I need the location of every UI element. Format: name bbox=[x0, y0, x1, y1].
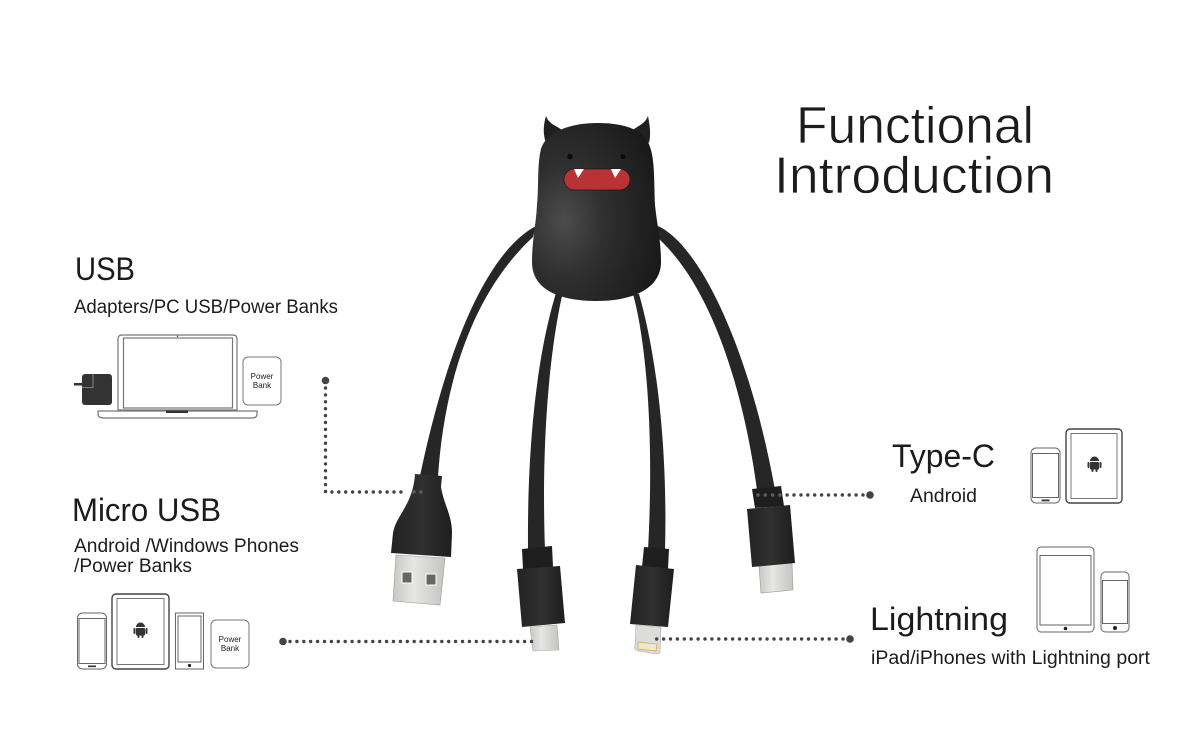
icon: power bank: Power bbox=[251, 372, 274, 381]
icon: android bbox=[1088, 456, 1102, 472]
USB plug bbox=[391, 474, 452, 605]
icon: laptop bbox=[98, 335, 257, 418]
left outer cable bbox=[420, 226, 536, 477]
title bbox=[774, 97, 1054, 205]
icon: USB devices bbox=[74, 335, 281, 418]
icon: tablet bbox=[1066, 429, 1122, 503]
icon: phone bbox=[78, 613, 106, 669]
icon: Micro USB devices bbox=[78, 594, 249, 669]
icon: Lightning devices bbox=[1037, 547, 1129, 632]
Lightning plug bbox=[630, 547, 674, 654]
dotted leader: USB bbox=[322, 377, 422, 492]
right outer cable bbox=[658, 226, 775, 490]
text block: Micro USB bbox=[72, 492, 299, 577]
icon: power bank: Power bbox=[219, 635, 242, 644]
dotted leader: Micro USB bbox=[279, 638, 538, 645]
icon: power bank: Bank bbox=[221, 644, 240, 653]
text block: Type-C bbox=[892, 438, 995, 507]
text block: Micro USB: Android /Windows Phones bbox=[74, 536, 299, 557]
icon: phone bbox=[1031, 448, 1060, 503]
mouth bbox=[564, 169, 630, 190]
text block: Lightning: Lightning bbox=[870, 601, 1008, 637]
text block: USB: USB bbox=[75, 251, 135, 287]
inner left cable bbox=[528, 293, 562, 550]
icon: power bank bbox=[243, 357, 281, 405]
icon: windows phone bbox=[176, 613, 204, 669]
text block: Micro USB: Micro USB bbox=[72, 492, 221, 528]
text block: USB: Adapters/PC USB/Power Banks bbox=[74, 297, 338, 318]
icon: iPad bbox=[1037, 547, 1094, 632]
dotted leader: Lightning bbox=[653, 635, 854, 643]
horns bbox=[544, 116, 562, 143]
title: Introduction bbox=[774, 147, 1054, 205]
icon: power bank bbox=[211, 620, 249, 668]
character cables bbox=[420, 226, 775, 550]
text block: Type-C: Type-C bbox=[892, 438, 995, 474]
text block: Type-C: Android bbox=[910, 486, 977, 507]
eyes bbox=[567, 154, 573, 159]
fangs bbox=[574, 169, 584, 178]
text block: Lightning: iPad/iPhones with Lightning port bbox=[871, 648, 1151, 669]
text block: Lightning bbox=[870, 601, 1151, 669]
icon: power bank: Bank bbox=[253, 381, 272, 390]
dotted leader: Type-C bbox=[758, 491, 874, 499]
icon: tablet bbox=[112, 594, 169, 669]
body shape bbox=[532, 123, 661, 301]
icon: iPhone bbox=[1101, 572, 1129, 632]
icon: power adapter bbox=[74, 374, 112, 405]
Type-C plug bbox=[747, 486, 795, 593]
character body bbox=[532, 116, 661, 301]
inner right cable bbox=[633, 294, 665, 550]
Micro USB plug bbox=[517, 546, 565, 651]
icon: Type-C devices bbox=[1031, 429, 1122, 503]
text block: Micro USB: /Power Banks bbox=[74, 556, 192, 577]
text block: USB bbox=[74, 251, 338, 318]
title: Functional bbox=[796, 97, 1034, 155]
icon: android bbox=[134, 623, 148, 638]
